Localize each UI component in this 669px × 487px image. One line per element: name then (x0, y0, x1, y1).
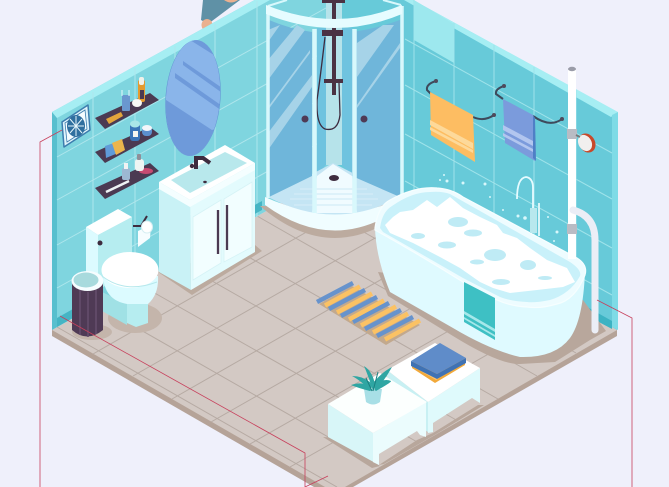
folded towels (411, 343, 466, 383)
cabinet doors (193, 182, 252, 280)
bath water (380, 192, 580, 302)
bath foam (385, 197, 575, 293)
shower fittings (302, 0, 368, 129)
tub shadow (378, 272, 606, 364)
shower cabin (260, 0, 410, 238)
tub rim (375, 188, 586, 308)
blue towel on rail (496, 84, 564, 161)
shower frame (266, 0, 402, 213)
bath mat (317, 283, 420, 345)
red leader lines (40, 130, 632, 487)
hand shower head (575, 130, 599, 156)
tub body (375, 188, 585, 357)
left bench with potted plant (323, 366, 427, 468)
top shelf (95, 77, 159, 129)
floor (52, 173, 617, 487)
right bench with folded towels (379, 343, 484, 465)
shower base shadow (260, 206, 410, 238)
pipe clamps (567, 129, 577, 139)
curved pipe (573, 210, 595, 330)
right wall (335, 0, 618, 330)
vanity cabinet with sink (158, 145, 262, 295)
toilet (86, 209, 162, 333)
faucet (196, 158, 210, 169)
freestanding tub faucet and water splashes (439, 174, 558, 242)
shower tray (265, 163, 405, 230)
bathtub (375, 188, 606, 364)
left glass panel (268, 20, 312, 197)
tub towel (464, 282, 495, 340)
window on right wall (414, 0, 454, 63)
wall fan vent (62, 105, 90, 147)
shelves with toiletries (95, 77, 159, 199)
person peeking over wall (201, 0, 240, 31)
wall pipe with hand shower (567, 67, 599, 330)
right glass panel (352, 20, 400, 197)
middle shelf (95, 120, 159, 163)
shower back strip (326, 0, 342, 165)
bottom shelf (95, 154, 159, 199)
potted plant (351, 366, 392, 404)
left wall (52, 0, 335, 330)
trash bin (72, 271, 112, 340)
yellow towel on rail (427, 79, 496, 162)
oval mirror (165, 40, 221, 156)
toilet paper holder (133, 216, 152, 247)
